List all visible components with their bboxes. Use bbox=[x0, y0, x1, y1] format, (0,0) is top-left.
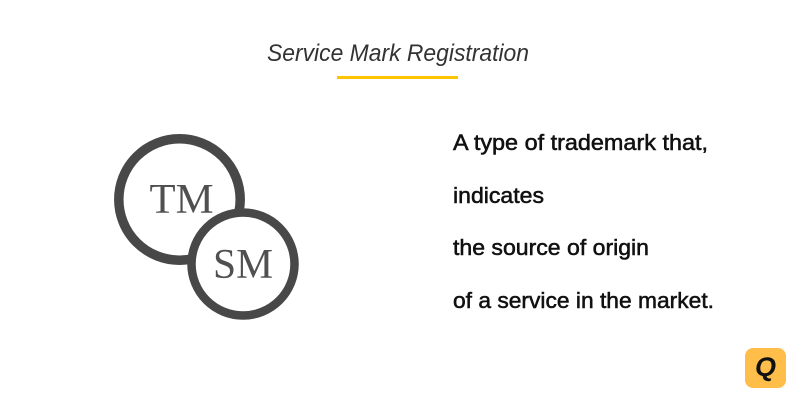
icon: TM and SM circles bbox=[119, 139, 294, 316]
description text: the source of origin bbox=[453, 235, 649, 260]
description text bbox=[453, 130, 714, 313]
title underline bbox=[337, 76, 458, 79]
icon: SM circle bbox=[192, 212, 294, 316]
description text: indicates bbox=[453, 183, 544, 208]
icon: TM circle bbox=[119, 139, 240, 260]
description text: of a service in the market. bbox=[453, 288, 714, 313]
logo: Q badge bbox=[745, 348, 786, 388]
description text: A type of trademark that, bbox=[453, 130, 708, 155]
title: Service Mark Registration bbox=[267, 40, 529, 67]
icon: SM circle: SM bbox=[213, 242, 273, 288]
icon: TM circle: TM bbox=[150, 177, 214, 223]
logo: Q badge: Q bbox=[755, 352, 776, 382]
